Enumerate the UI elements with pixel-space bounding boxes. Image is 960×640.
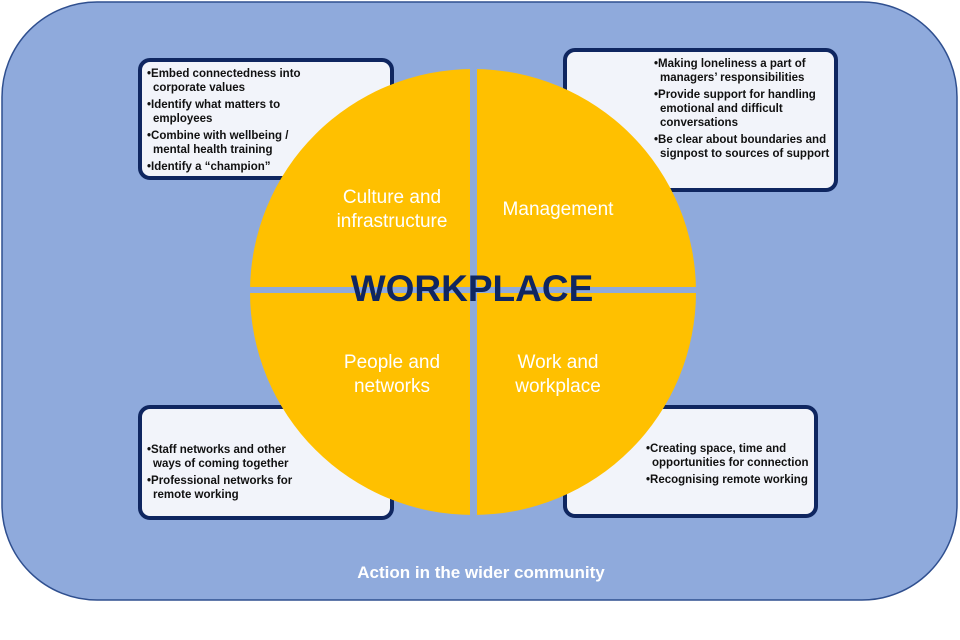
chart: workplace circle: People and — [344, 352, 440, 373]
panel: culture box: mental health training — [153, 144, 272, 156]
panel: people box: remote working — [153, 489, 239, 501]
panel: management box: •Be clear about boundaries and — [654, 134, 826, 146]
chart: workplace circle: infrastructure — [337, 211, 447, 232]
panel: culture box: •Identify what matters to — [147, 99, 280, 111]
panel: work box — [565, 407, 816, 516]
panel: culture box: employees — [153, 113, 212, 125]
chart: workplace circle — [246, 64, 700, 520]
panel: management box: •Provide support for handling — [654, 89, 816, 101]
panel: work box: •Recognising remote working — [646, 474, 808, 486]
caption: wider community: Action in the wider community — [357, 563, 605, 582]
panel: people box: •Professional networks for — [147, 475, 293, 487]
panel: people box: •Staff networks and other — [147, 444, 286, 456]
panel: people box — [140, 407, 392, 518]
panel: management box: managers’ responsibilities — [660, 72, 804, 84]
panel: culture box: •Combine with wellbeing / — [147, 130, 289, 142]
chart: workplace circle: workplace — [514, 376, 601, 397]
panel: management box — [565, 50, 836, 190]
chart: workplace circle: networks — [354, 376, 430, 397]
panel: culture box: corporate values — [153, 82, 245, 94]
chart: workplace circle: Work and — [518, 352, 598, 373]
chart: workplace circle: Culture and — [343, 187, 441, 208]
panel: management box: emotional and difficult — [660, 103, 783, 115]
title: workplace: WORKPLACE — [351, 268, 593, 309]
panel: management box: •Making loneliness a part of — [654, 58, 806, 70]
panel: people box: ways of coming together — [152, 458, 289, 470]
panel: work box: •Creating space, time and — [646, 443, 786, 455]
chart: workplace circle: Management — [503, 199, 614, 220]
panel: culture box: •Identify a “champion” — [147, 161, 271, 173]
panel: culture box: •Embed connectedness into — [147, 68, 301, 80]
panel: management box: signpost to sources of support — [660, 148, 829, 160]
panel: management box: conversations — [660, 117, 738, 129]
panel: culture box — [140, 60, 392, 178]
panel: work box: opportunities for connection — [652, 457, 809, 469]
